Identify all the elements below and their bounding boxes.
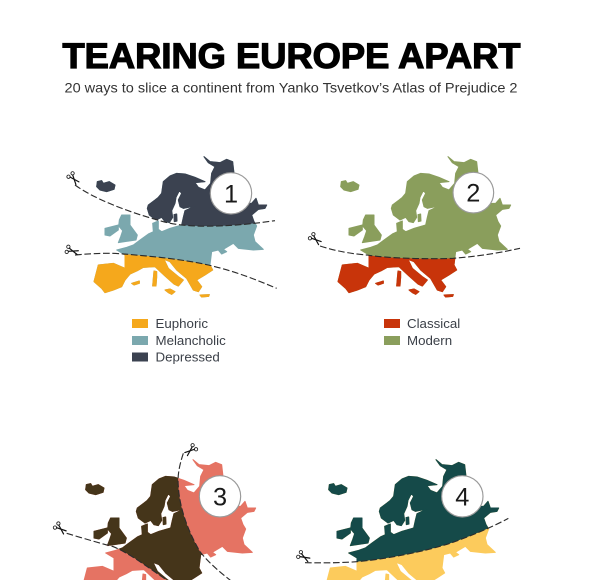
map 1: euphoric, melancholic, depressed xyxy=(65,157,277,297)
map 2: classical, modern xyxy=(308,157,520,297)
legend: map 2: Classical xyxy=(407,316,460,331)
legend: map 2: Modern xyxy=(407,333,452,348)
legend: map 1 xyxy=(132,316,226,364)
legend: map 1: Euphoric xyxy=(156,316,208,331)
map 4 xyxy=(296,460,508,580)
legend: map 1: Depressed xyxy=(156,350,220,364)
map 3: 3 xyxy=(213,483,227,511)
map 2: classical, modern: 2 xyxy=(466,180,480,208)
title: TEARING EUROPE APART xyxy=(62,37,520,76)
legend: map 2 xyxy=(384,316,460,348)
map 1: euphoric, melancholic, depressed: 1 xyxy=(224,180,238,208)
map 4: 4 xyxy=(455,483,469,511)
subtitle: 20 ways to slice a continent from Yanko Tsvetkov’s Atlas of Prejudice 2 xyxy=(64,80,518,96)
map 3 xyxy=(53,443,256,580)
legend: map 1: Melancholic xyxy=(156,333,226,348)
